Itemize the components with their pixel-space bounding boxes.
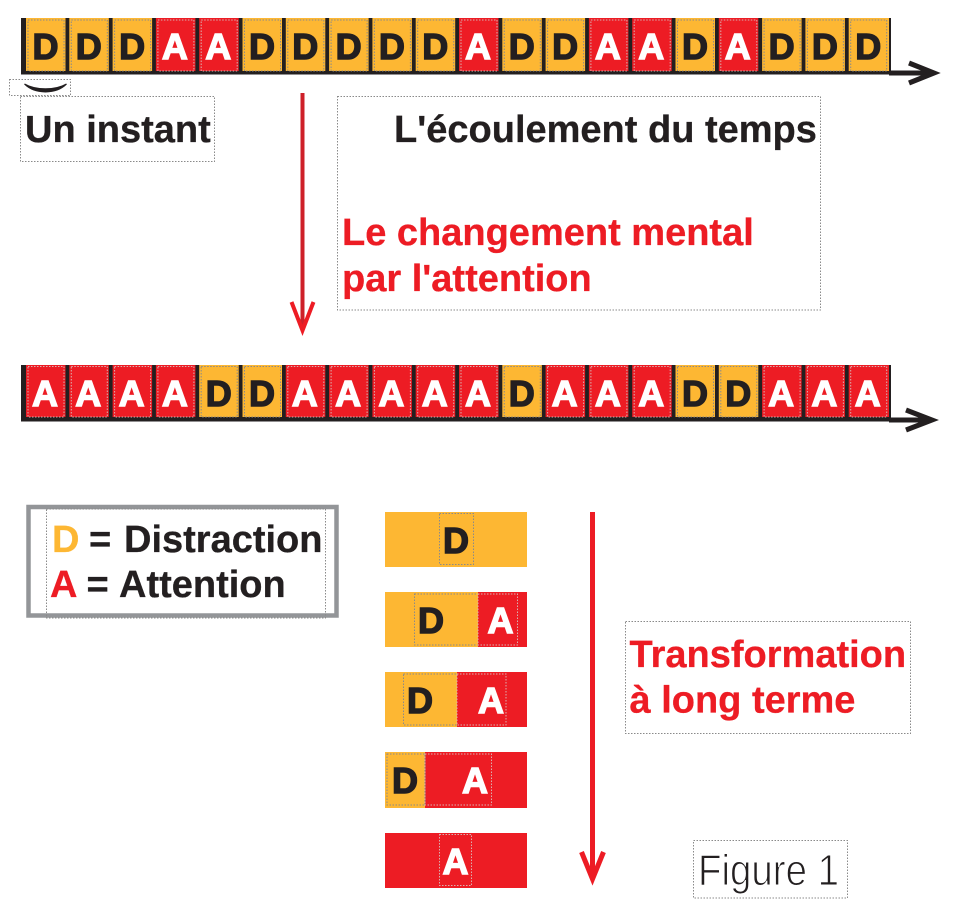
timeline: attention dominant: D [725, 373, 751, 414]
bar 3: balanced: A [478, 680, 504, 721]
timeline: attention dominant: A [595, 373, 621, 414]
timeline: distraction dominant: D [379, 26, 405, 67]
timeline: distraction dominant: D [119, 26, 145, 67]
legend row: attention: A [50, 564, 77, 606]
arrow: flow of time, bottom [889, 410, 932, 430]
timeline: attention dominant: A [768, 373, 794, 414]
timeline: attention dominant: A [855, 373, 881, 414]
legend row: distraction: = [89, 519, 111, 561]
timeline: distraction dominant: A [638, 26, 664, 67]
bar 1: all distraction [385, 512, 527, 567]
bar 4: mostly attention: A [462, 760, 488, 801]
timeline: distraction dominant: D [76, 26, 102, 67]
label: Un instant [20, 96, 214, 162]
timeline: distraction dominant: D [292, 26, 318, 67]
legend row: attention: Attention [119, 564, 286, 606]
bar 5: all attention: A [442, 841, 468, 882]
arrow: flow of time, top [889, 63, 934, 83]
timeline: distraction dominant: D [855, 26, 881, 67]
timeline: attention dominant: D [206, 373, 232, 414]
timeline: distraction dominant: D [336, 26, 362, 67]
label: Un instant: Un instant [25, 109, 211, 151]
timeline: distraction dominant [21, 18, 891, 74]
bar 1: all distraction: D [443, 520, 469, 561]
timeline: attention dominant: A [75, 373, 101, 414]
legend [28, 507, 336, 618]
timeline: distraction dominant: A [725, 26, 751, 67]
brace: one instant [10, 80, 70, 96]
timeline: attention dominant: A [552, 373, 578, 414]
legend row: distraction: Distraction [124, 519, 322, 561]
timeline: attention dominant: A [422, 373, 448, 414]
timeline: distraction dominant: D [552, 26, 578, 67]
timeline: distraction dominant: D [812, 26, 838, 67]
timeline: attention dominant: A [119, 373, 145, 414]
bar 2: mostly distraction [385, 592, 527, 647]
timeline: distraction dominant: D [422, 26, 448, 67]
timeline: attention dominant: A [811, 373, 837, 414]
arrow: mental change [292, 93, 314, 330]
label: long-term transformation [626, 622, 910, 734]
caption: Figure 1: Figure 1 [698, 846, 839, 895]
timeline: attention dominant: A [465, 373, 491, 414]
arrow: long-term transformation [582, 512, 604, 879]
legend row: distraction: D [52, 519, 79, 561]
bar 4: mostly attention: D [392, 760, 418, 801]
timeline: distraction dominant: D [769, 26, 795, 67]
bar 5: all attention [385, 833, 527, 888]
timeline: attention dominant: A [32, 373, 58, 414]
timeline: distraction dominant: D [509, 26, 535, 67]
timeline: distraction dominant: A [205, 26, 231, 67]
timeline: attention dominant: A [335, 373, 361, 414]
bar 4: mostly attention [385, 752, 527, 808]
label: long-term transformation: Transformation [630, 634, 906, 676]
timeline: attention dominant: D [682, 373, 708, 414]
timeline: attention dominant: D [249, 373, 275, 414]
label: mental change by attention: Le changement mental [342, 212, 754, 254]
timeline: attention dominant: D [509, 373, 535, 414]
text block: time flow and mental change [338, 96, 820, 310]
timeline: distraction dominant: D [682, 26, 708, 67]
timeline: distraction dominant: D [249, 26, 275, 67]
bar 2: mostly distraction: D [418, 600, 444, 641]
timeline: distraction dominant: D [32, 26, 58, 67]
timeline: distraction dominant: A [465, 26, 491, 67]
timeline: attention dominant [21, 365, 891, 422]
timeline: attention dominant: A [378, 373, 404, 414]
bar 2: mostly distraction: A [488, 600, 514, 641]
timeline: distraction dominant: A [162, 26, 188, 67]
stacked bars: long-term transformation [385, 512, 527, 888]
timeline: attention dominant: A [638, 373, 664, 414]
label: flow of time: L'écoulement du temps [394, 109, 817, 151]
bar 3: balanced: D [407, 680, 433, 721]
legend row: attention: = [86, 564, 109, 606]
timeline: attention dominant: A [292, 373, 318, 414]
timeline: attention dominant: A [162, 373, 188, 414]
timeline: distraction dominant: A [595, 26, 621, 67]
bar 3: balanced [385, 672, 527, 727]
label: mental change by attention: par l'attention [342, 258, 592, 300]
label: long-term transformation: à long terme [630, 680, 855, 722]
